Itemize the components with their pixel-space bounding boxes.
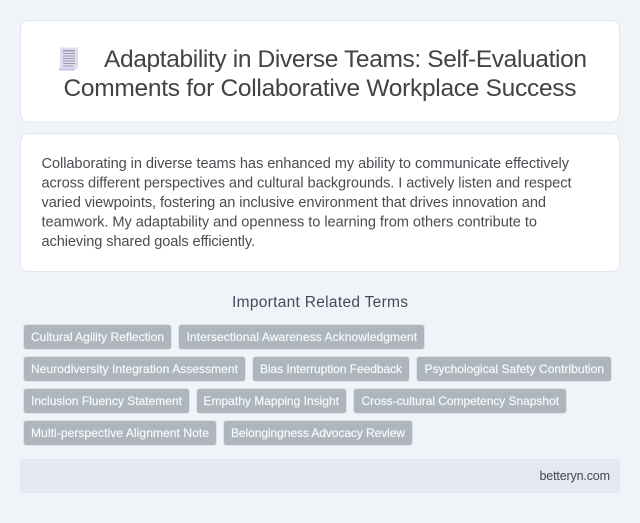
tag: psychological safety contribution: Psychological Safety Contribution <box>424 362 604 376</box>
footer site name: betteryn.com <box>540 469 610 483</box>
tag: inclusion fluency statement <box>24 388 190 414</box>
tag: belongingness advocacy review: Belongingness Advocacy Review <box>231 426 405 440</box>
self-evaluation paragraph: Collaborating in diverse teams has enhanced my ability to communicate effectively <box>42 156 570 172</box>
tag: cross-cultural competency snapshot: Cross-cultural Competency Snapshot <box>362 394 560 408</box>
tag: cross-cultural competency snapshot <box>354 388 566 414</box>
self-evaluation paragraph: varied viewpoints, fostering an inclusive environment that drives innovation and <box>42 195 546 211</box>
heading: important related terms: Important Related Terms <box>232 294 408 311</box>
tag: psychological safety contribution <box>416 356 612 382</box>
panel: title card <box>20 20 620 122</box>
panel: self-evaluation text card <box>20 134 620 272</box>
tag: bias interruption feedback: Bias Interruption Feedback <box>260 362 403 376</box>
tag: multi-perspective alignment note: Multi-perspective Alignment Note <box>31 426 209 440</box>
self-evaluation paragraph: achieving shared goals efficiently. <box>42 234 255 250</box>
tag: inclusion fluency statement: Inclusion Fluency Statement <box>31 394 183 408</box>
tag: multi-perspective alignment note <box>24 420 216 446</box>
tag: bias interruption feedback <box>252 356 410 382</box>
title: Comments for Collaborative Workplace Success <box>64 75 576 102</box>
tag: cultural agility reflection <box>24 324 172 350</box>
tag: belongingness advocacy review <box>224 420 412 446</box>
title: Adaptability in Diverse Teams: Self-Evaluation <box>104 46 587 73</box>
footer bar <box>20 459 620 493</box>
tag: cultural agility reflection: Cultural Agility Reflection <box>31 330 164 344</box>
tag list <box>24 324 612 446</box>
tag: intersectional awareness acknowledgment: Intersectional Awareness Acknowledgment <box>186 330 418 344</box>
self-evaluation paragraph <box>42 156 572 250</box>
tag: empathy mapping insight: Empathy Mapping Insight <box>204 394 340 408</box>
tag: neurodiversity integration assessment <box>24 356 246 382</box>
tag: intersectional awareness acknowledgment <box>178 324 424 350</box>
tag: neurodiversity integration assessment: Neurodiversity Integration Assessment <box>31 362 239 376</box>
icon: receipt scroll <box>58 48 78 70</box>
title <box>64 46 587 102</box>
self-evaluation paragraph: across different perspectives and cultural backgrounds. I actively listen and respect <box>42 176 572 192</box>
tag: empathy mapping insight <box>196 388 346 414</box>
self-evaluation paragraph: teamwork. My adaptability and openness to learning from others contribute to <box>42 214 537 230</box>
